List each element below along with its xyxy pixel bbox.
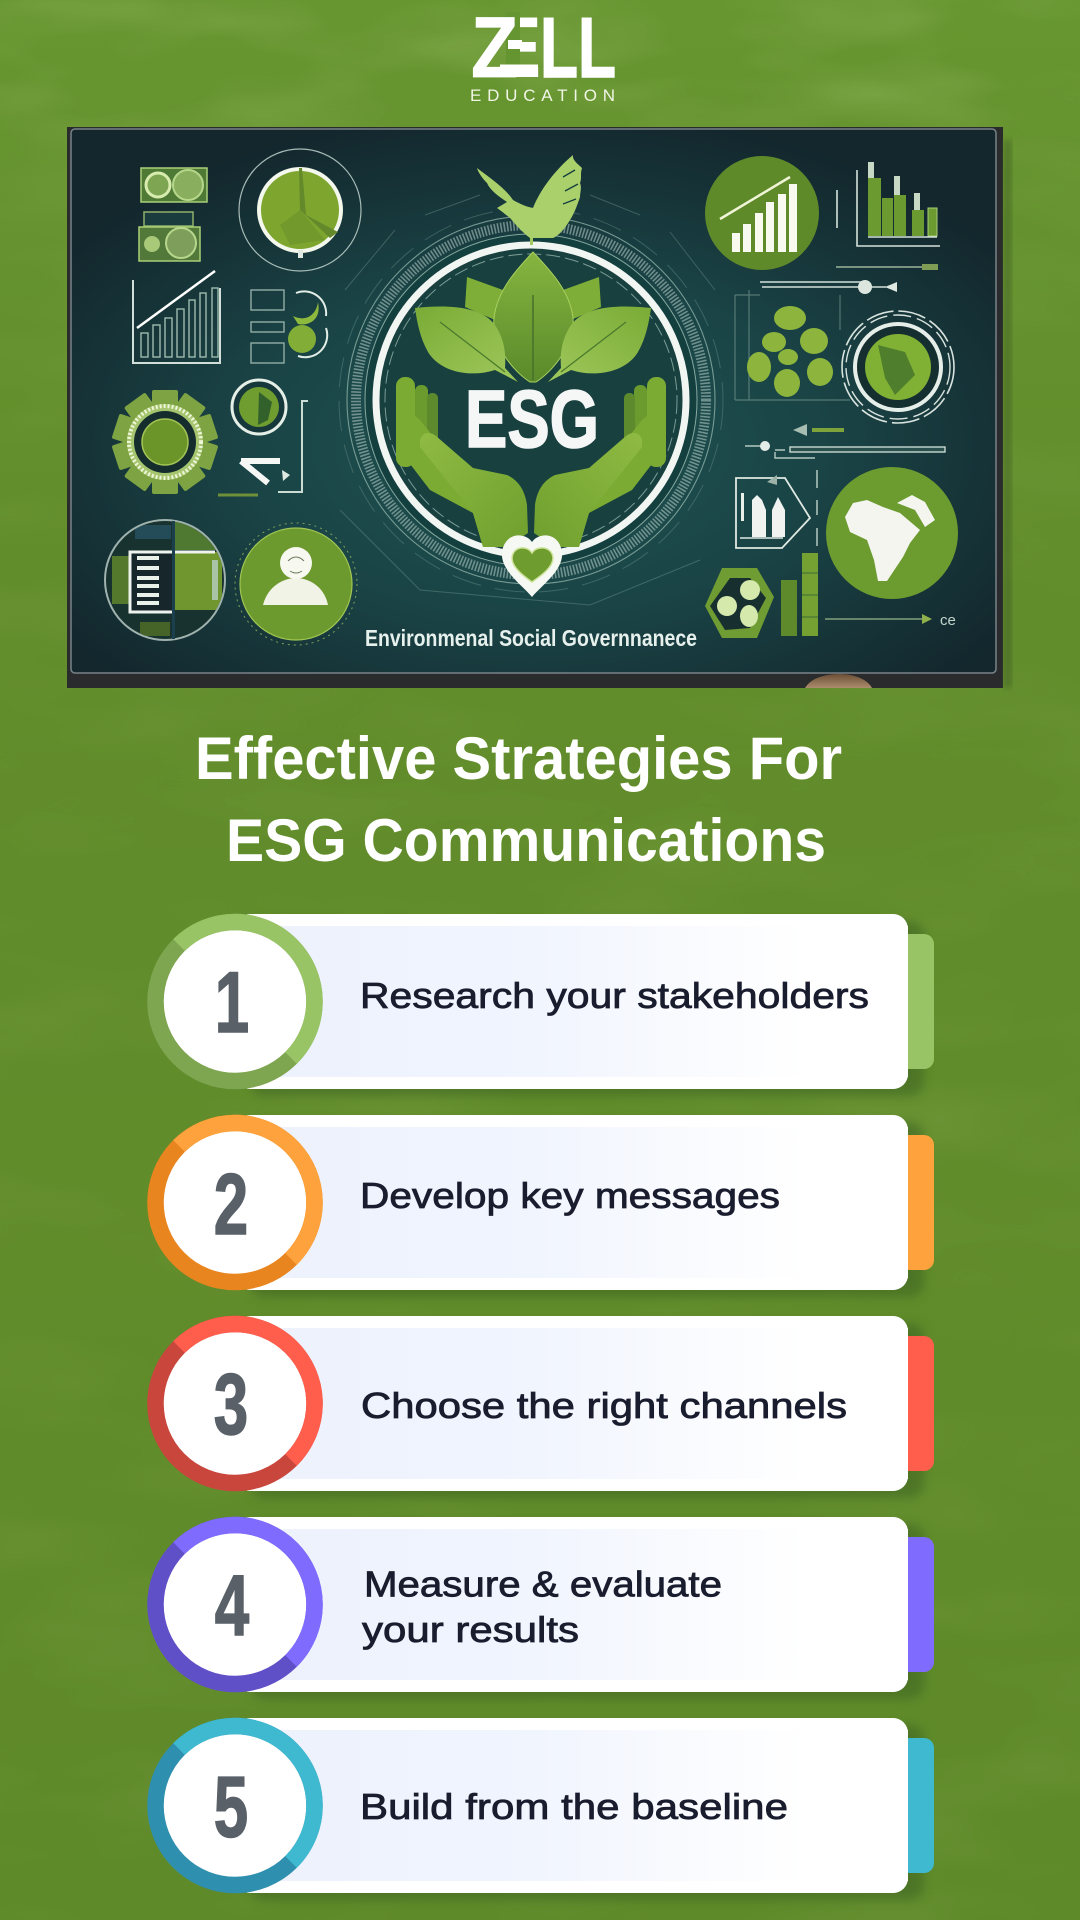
colour tab [880, 1537, 934, 1672]
colour tab [880, 1738, 934, 1873]
screen surface [71, 129, 996, 673]
icon: growth chart circle [705, 156, 819, 270]
icon: globe with rings [842, 311, 954, 423]
logo: Zell Education: L [540, 1, 578, 96]
card body [235, 1718, 908, 1893]
icon: gear [112, 390, 218, 494]
white ring [376, 245, 686, 555]
screen bezel [67, 127, 1003, 688]
number: 1 [215, 954, 249, 1050]
strategy card 3 [156, 1316, 934, 1498]
strategy card 5 [156, 1718, 934, 1900]
icon: person circle [235, 523, 357, 645]
dove [477, 155, 582, 245]
card shadow [250, 1122, 924, 1297]
image panel: ESG screen [67, 127, 1012, 688]
card shadow [250, 1725, 924, 1900]
icon: dashboard circle [105, 520, 225, 640]
number: 3 [214, 1356, 248, 1452]
number ring [156, 1123, 315, 1282]
hands [396, 377, 666, 547]
number ring [156, 1525, 315, 1684]
background: green wrinkled paper [0, 0, 1080, 1124]
icon: pentagon with bottles [736, 470, 817, 548]
logo: Zell Education: Z [471, 0, 518, 96]
number: 4 [215, 1557, 249, 1653]
card shadow [250, 1323, 924, 1498]
chart: rising line and bars [133, 271, 220, 363]
card shadow [250, 921, 924, 1096]
icon: hexagon recycling [705, 568, 774, 638]
icon: recycling blobs [747, 306, 833, 397]
number: 2 [214, 1156, 248, 1252]
title: ESG Communications [226, 807, 826, 874]
central ESG emblem [339, 155, 723, 605]
icon: right arrow axis [825, 612, 956, 629]
textured ring [356, 225, 706, 575]
number: 5 [214, 1758, 248, 1855]
label: your results [362, 1609, 579, 1650]
logo: Zell Education: EDUCATION [470, 86, 615, 105]
icon: money boxes [139, 168, 207, 261]
head of presenter [805, 674, 872, 688]
card body [235, 1115, 908, 1290]
number ring [156, 922, 315, 1081]
ESG wordmark: ESG [465, 374, 599, 465]
icon: right arrow axis: ce [940, 612, 956, 629]
logo: Zell Education [470, 0, 616, 105]
card shadow [250, 1524, 924, 1699]
number ring [156, 1726, 315, 1885]
icon: dash and long bar [745, 424, 945, 458]
label: Choose the right channels [361, 1385, 847, 1426]
icon: leaf list [251, 290, 327, 363]
chart: green bar chart [836, 162, 940, 270]
strategy card 4 [156, 1517, 934, 1699]
card body [235, 1517, 908, 1692]
label: Measure & evaluate [364, 1564, 722, 1604]
icon: pie globe [239, 149, 361, 271]
strategy card 2 [156, 1115, 934, 1297]
label: Develop key messages [360, 1175, 780, 1216]
strategy card 1 [156, 914, 934, 1096]
icon: small globe and bracket [218, 380, 308, 495]
icon: africa globe [826, 467, 958, 599]
title: Effective Strategies For [195, 725, 842, 792]
label: Research your stakeholders [360, 975, 869, 1016]
logo: Zell Education: L [578, 1, 616, 96]
colour tab [880, 1336, 934, 1471]
colour tab [880, 934, 934, 1069]
label: Build from the baseline [360, 1786, 788, 1827]
icon: green bars [781, 553, 818, 636]
colour tab [880, 1135, 934, 1270]
caption: environmental social governance: Environmenal Social Governnanece [365, 625, 697, 651]
leaves [415, 252, 651, 382]
icon: connector line [735, 280, 897, 400]
title [195, 725, 842, 874]
heart [502, 535, 562, 597]
number ring [156, 1324, 315, 1483]
label [362, 1564, 722, 1650]
card body [235, 914, 908, 1089]
card body [235, 1316, 908, 1491]
logo: Zell Education: E [508, 0, 540, 96]
